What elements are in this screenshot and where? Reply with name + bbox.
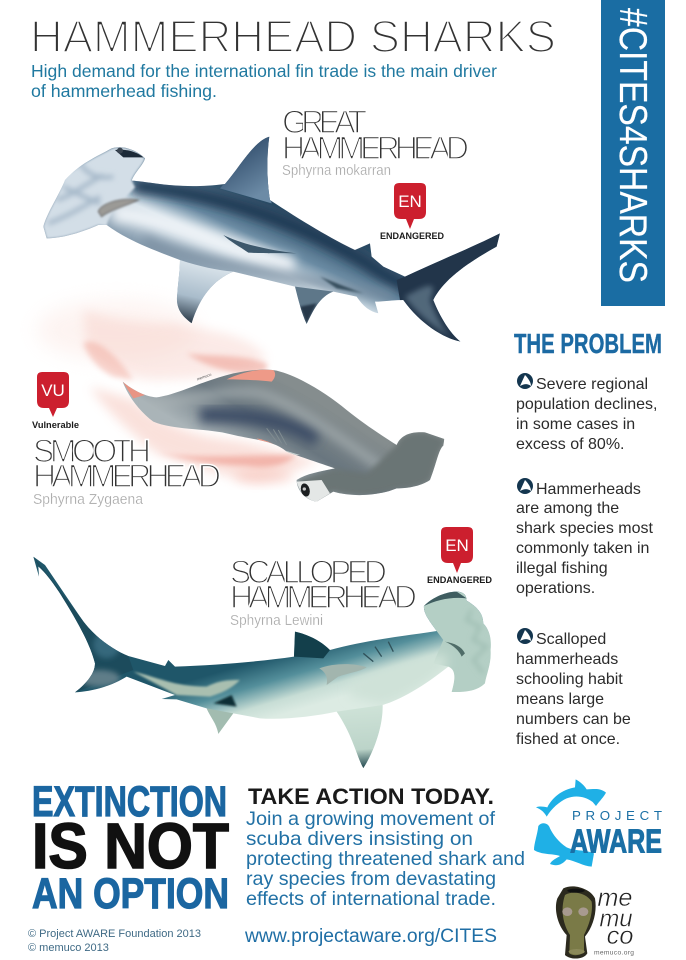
call to action: effects of international trade. (246, 888, 496, 910)
pectoral fin (177, 260, 233, 323)
status badge: vulnerable: VU (41, 381, 65, 400)
copyright (28, 928, 201, 954)
illustration: scalloped hammerhead shark (30, 553, 497, 773)
status badge: vulnerable: Vulnerable (32, 420, 79, 431)
species label: smooth hammerhead (33, 433, 221, 508)
subtitle (31, 61, 497, 101)
species label: great hammerhead: GREAT (282, 104, 367, 140)
status badge: endangered (great): ENDANGERED (380, 231, 444, 241)
slogan: extinction is not an option (32, 778, 229, 918)
problem point 2: commonly taken in (516, 540, 649, 557)
call to action: scuba divers insisting on (246, 828, 473, 850)
logo wordmark: mu (599, 906, 633, 933)
website url: www.projectaware.org/CITES (244, 926, 497, 947)
species label: scalloped hammerhead: Sphyrna Lewini (230, 612, 323, 629)
tail (397, 233, 500, 342)
status badge: vulnerable (32, 372, 79, 431)
species label: scalloped hammerhead: SCALLOPED (230, 554, 387, 590)
logo wordmark (570, 808, 662, 861)
call to action: Join a growing movement of (246, 808, 496, 830)
problem point 2: shark species most (516, 520, 653, 537)
problem point 3: Scalloped (536, 631, 606, 648)
call to action: ray species from devastating (246, 868, 496, 890)
dorsal fin (220, 137, 272, 203)
shark mouth (98, 199, 138, 217)
problem point 1 (516, 373, 657, 453)
icon: gas mask figure (556, 886, 596, 959)
illustration: smooth hammerhead shark (120, 367, 447, 503)
banner: #CITES4SHARKS: #CITES4SHARKS (611, 8, 654, 283)
copyright: © memuco 2013 (28, 942, 109, 954)
problem point 3 (516, 628, 631, 748)
icon: shark (536, 779, 606, 817)
illustration: great hammerhead shark (40, 133, 503, 347)
slogan: extinction is not an option: AN OPTION (32, 870, 229, 918)
species label: smooth hammerhead: SMOOTH (33, 433, 151, 469)
icon: diver (534, 823, 594, 867)
problem point 2: illegal fishing (516, 560, 608, 577)
species label: scalloped hammerhead: HAMMERHEAD (230, 579, 417, 615)
call to action: protecting threatened shark and (246, 848, 525, 870)
status badge: endangered (scalloped): EN (445, 536, 469, 555)
problem point 2: Hammerheads (536, 481, 641, 498)
copyright: © Project AWARE Foundation 2013 (28, 928, 201, 940)
status badge: endangered (scalloped): ENDANGERED (427, 575, 492, 585)
problem point 1: excess of 80%. (516, 436, 624, 453)
species label: scalloped hammerhead (230, 554, 417, 629)
hammer head (43, 147, 145, 238)
problem point 3: hammerheads (516, 651, 618, 668)
problem point 2: are among the (516, 500, 619, 517)
species label: great hammerhead (282, 104, 469, 179)
logo: project aware (534, 779, 662, 867)
problem point 1: Severe regional (536, 376, 648, 393)
slogan: extinction is not an option: IS NOT (32, 810, 229, 882)
problem point 3: numbers can be (516, 711, 631, 728)
status badge: endangered (great): EN (398, 192, 422, 211)
species label: great hammerhead: Sphyrna mokarran (282, 162, 391, 179)
icon: bullet (517, 628, 533, 644)
logo: memuco: memuco.org (594, 949, 634, 956)
logo: memuco (556, 884, 634, 959)
problem point 3: means large (516, 691, 604, 708)
logo wordmark: co (607, 922, 633, 950)
pelvic fin (295, 287, 333, 324)
problem point 2: operations. (516, 580, 595, 597)
species label: smooth hammerhead: HAMMERHEAD (33, 458, 221, 494)
illustration: blood cloud (37, 300, 320, 484)
status badge: endangered (great) (380, 183, 444, 241)
call to action (246, 784, 525, 910)
icon: bullet (517, 478, 533, 494)
subtitle: High demand for the international fin trade is the main driver (31, 61, 497, 81)
signature: memuco (196, 371, 213, 382)
call to action: TAKE ACTION TODAY. (248, 784, 494, 809)
species label: smooth hammerhead: Sphyrna Zygaena (33, 491, 144, 508)
logo wordmark: PROJECT (572, 808, 662, 823)
title: HAMMERHEAD SHARKS (30, 11, 556, 62)
species label: great hammerhead: HAMMERHEAD (282, 130, 469, 166)
slogan: extinction is not an option: EXTINCTION (32, 778, 227, 826)
icon: bullet (517, 373, 533, 389)
subtitle: of hammerhead fishing. (31, 81, 217, 101)
logo wordmark: me (597, 884, 633, 912)
logo wordmark (597, 884, 633, 950)
problem point 3: fished at once. (516, 731, 620, 748)
problem point 1: population declines, (516, 396, 657, 413)
problem point 1: in some cases in (516, 416, 635, 433)
problem point 3: schooling habit (516, 671, 623, 688)
banner: #CITES4SHARKS (601, 0, 665, 306)
status badge: endangered (scalloped) (427, 527, 492, 585)
pectoral fin (319, 664, 367, 685)
problem point 2 (516, 478, 653, 597)
